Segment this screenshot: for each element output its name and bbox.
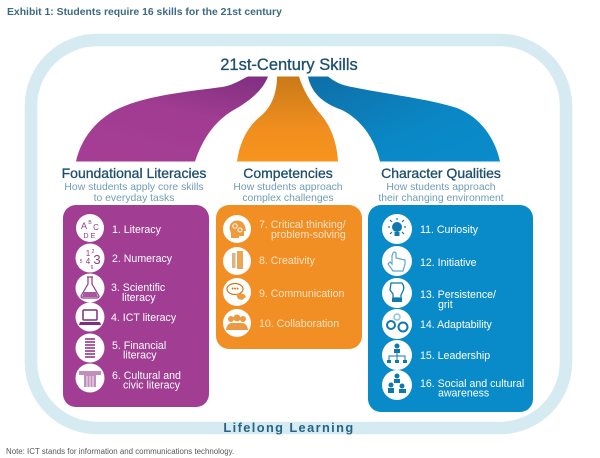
footnote: Note: ICT stands for information and communications technology. <box>6 447 234 456</box>
item 10 collaboration <box>223 309 339 337</box>
item 2 numeracy: 6 <box>91 265 94 271</box>
item 14 adaptability: 14. Adaptability <box>420 319 493 331</box>
item 6 cultural and civic literacy: 6. Cultural and <box>112 370 181 382</box>
exhibit title: Exhibit 1: Students require 16 skills for the 21st century <box>7 7 282 18</box>
item 6 cultural and civic literacy: civic literacy <box>123 380 181 392</box>
item 1 literacy: B <box>88 220 92 226</box>
item 10 collaboration: 10. Collaboration <box>259 318 339 330</box>
item 1 literacy: D <box>83 233 89 240</box>
item 15 leadership: 15. Leadership <box>420 350 490 362</box>
item 16 social and cultural awareness: awareness <box>438 388 489 400</box>
item 1 literacy <box>76 214 162 242</box>
item 16 social and cultural awareness <box>382 370 524 400</box>
item 1 literacy: C <box>93 223 99 232</box>
subheading: their changing environment <box>378 193 504 204</box>
item 13 persistence/grit <box>382 278 496 311</box>
item 9 communication: 9. Communication <box>259 288 344 300</box>
item 5 financial literacy: 5. Financial <box>112 340 166 352</box>
subheading: How students approach <box>233 182 343 193</box>
item 11 curiosity <box>382 214 479 244</box>
item 5 financial literacy: literacy <box>123 350 157 362</box>
heading: character qualities <box>378 165 504 204</box>
item 3 scientific literacy <box>76 274 166 304</box>
heading: competencies: Competencies <box>243 165 333 181</box>
item 3 scientific literacy: literacy <box>122 292 156 304</box>
flow: character qualities <box>308 76 500 162</box>
item 9 communication: ••• <box>231 286 239 293</box>
item 8 creativity: 8. Creativity <box>259 255 316 267</box>
item 7 critical thinking <box>223 215 346 243</box>
item 2 numeracy: 4 <box>86 257 91 266</box>
flow: competencies <box>237 76 338 162</box>
item 4 ict literacy: 4. ICT literacy <box>111 312 177 324</box>
heading: character qualities: Character Qualities <box>381 165 501 181</box>
subheading: complex challenges <box>242 193 334 204</box>
item 1 literacy: A <box>81 221 87 231</box>
item 2 numeracy: 3 <box>93 252 101 267</box>
item 7 critical thinking: 7. Critical thinking/ <box>259 219 346 231</box>
main title: 21st-Century Skills <box>220 56 358 74</box>
heading: foundational literacies: Foundational Literacies <box>62 165 206 181</box>
item 2 numeracy: 5 <box>80 259 83 265</box>
item 15 leadership <box>382 340 490 370</box>
lifelong learning label: Lifelong Learning <box>223 420 355 435</box>
item 2 numeracy: 2. Numeracy <box>112 253 173 265</box>
subheading: to everyday tasks <box>94 193 174 204</box>
subheading: How students apply core skills <box>64 182 204 193</box>
item 3 scientific literacy: 3. Scientific <box>111 282 165 294</box>
item 1 literacy: E <box>91 233 96 240</box>
item 9 communication <box>223 278 344 306</box>
item 2 numeracy: 1 <box>86 249 91 258</box>
subheading: How students approach <box>386 182 496 193</box>
item 14 adaptability <box>382 309 493 339</box>
item 2 numeracy: 2 <box>92 249 95 255</box>
panel: character qualities <box>368 205 533 412</box>
item 16 social and cultural awareness: 16. Social and cultural <box>420 378 524 390</box>
item 13 persistence/grit: grit <box>438 299 453 311</box>
panel: competencies <box>216 205 362 349</box>
panel: foundational literacies <box>63 205 209 407</box>
item 5 financial literacy <box>76 334 166 362</box>
heading: competencies <box>233 165 343 204</box>
flow: foundational literacies <box>76 76 268 162</box>
item 7 critical thinking: problem-solving <box>271 229 346 241</box>
item 12 initiative: 12. Initiative <box>420 257 477 269</box>
item 8 creativity <box>223 247 316 275</box>
item 4 ict literacy <box>76 302 177 332</box>
item 2 numeracy <box>76 244 173 272</box>
item 1 literacy: 1. Literacy <box>112 224 162 236</box>
item 11 curiosity: 11. Curiosity <box>420 224 479 236</box>
item 12 initiative <box>382 246 477 276</box>
heading: foundational literacies <box>62 165 206 204</box>
item 6 cultural and civic literacy <box>76 364 181 392</box>
lifelong learning ring <box>31 40 566 428</box>
item 13 persistence/grit: 13. Persistence/ <box>420 289 496 301</box>
